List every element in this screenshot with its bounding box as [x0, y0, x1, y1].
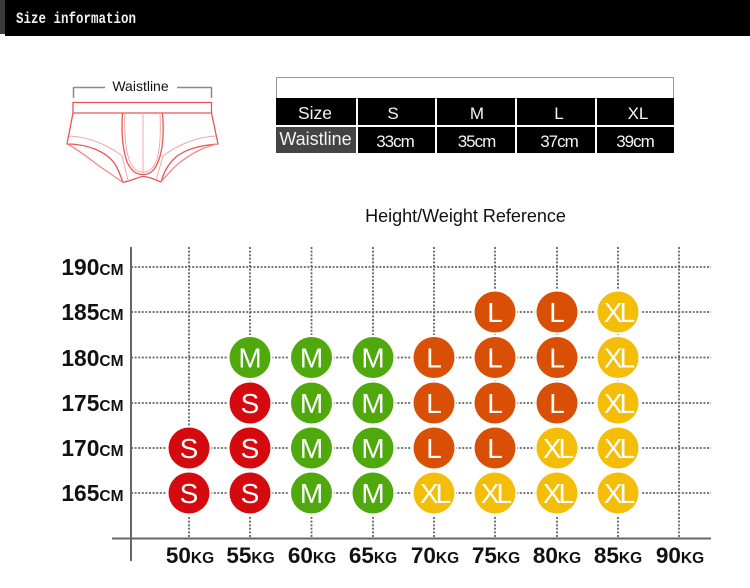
size table: M [470, 104, 484, 123]
header bar [0, 0, 750, 36]
size markers: 185 cm row: L [549, 297, 565, 328]
size markers: 165 cm row: XL [543, 478, 574, 509]
size markers: 170 cm row: M [300, 433, 323, 464]
size markers: 175 cm row: M [361, 388, 385, 419]
size markers: 185 cm row: XL [604, 297, 635, 328]
size table: 37cm [540, 132, 579, 151]
size markers: 170 cm row: XL [604, 433, 635, 464]
y axis labels [61, 254, 124, 506]
size markers: 165 cm row: XL [420, 478, 451, 509]
size markers: 170 cm row: S [241, 433, 259, 464]
size table: L [554, 104, 564, 123]
size markers: 175 cm row: M [300, 388, 323, 419]
size markers: 180 cm row: L [487, 342, 503, 374]
size markers: 180 cm row: L [549, 342, 565, 374]
chart title: Height/Weight Reference [365, 206, 566, 226]
size markers: 175 cm row: S [241, 388, 259, 419]
x axis labels: 55KG [226, 543, 275, 568]
size markers: 165 cm row: M [300, 478, 323, 509]
y axis labels: 175CM [61, 390, 124, 416]
size markers: 175 cm row [228, 380, 640, 426]
size markers: 180 cm row [228, 335, 640, 380]
y axis labels: 180CM [61, 345, 124, 371]
size table: S [387, 104, 399, 123]
size markers: 175 cm row: XL [604, 388, 635, 419]
x axis labels: 80KG [533, 543, 581, 568]
x axis labels: 75KG [472, 543, 520, 568]
y axis labels: 170CM [61, 435, 124, 461]
size table: XL [628, 104, 648, 123]
x axis labels: 65KG [349, 543, 397, 568]
header bar: Size information [16, 11, 136, 29]
icon: briefs with waistline bracket [67, 78, 218, 182]
size markers: 170 cm row: XL [543, 433, 574, 464]
size markers: 170 cm row: S [180, 433, 198, 464]
size table: 33cm [376, 132, 415, 151]
x axis labels: 70KG [411, 543, 459, 568]
size markers: 175 cm row: L [426, 388, 442, 419]
size table: 39cm [616, 132, 655, 151]
x axis labels: 90KG [656, 543, 704, 568]
size markers: 175 cm row: L [487, 388, 503, 419]
size markers: 165 cm row: M [361, 478, 385, 509]
size markers: 165 cm row: S [180, 478, 198, 509]
size table: 35cm [458, 132, 496, 151]
size markers: 170 cm row: L [487, 433, 503, 464]
x axis labels: 50KG [166, 543, 214, 568]
x axis labels [166, 543, 704, 568]
size markers: 170 cm row: M [361, 433, 385, 464]
size markers: 170 cm row: L [426, 433, 442, 464]
size markers: 165 cm row [166, 470, 640, 516]
size markers: 180 cm row: M [238, 342, 262, 374]
size markers: 165 cm row: XL [481, 478, 512, 509]
y axis labels: 165CM [61, 480, 124, 506]
size markers: 180 cm row: M [361, 342, 385, 374]
size table: Size [298, 103, 332, 123]
size table: Waistline [279, 129, 352, 149]
size markers: 180 cm row: L [426, 342, 442, 374]
size markers: 175 cm row: L [549, 388, 565, 419]
icon: briefs with waistline bracket: Waistline [112, 78, 169, 94]
grid lines [131, 247, 711, 538]
size markers: 165 cm row: S [241, 478, 259, 509]
size markers: 185 cm row [472, 290, 640, 334]
size markers: 185 cm row: L [487, 297, 503, 328]
size markers: 180 cm row: XL [604, 342, 635, 374]
size markers: 170 cm row [166, 426, 640, 470]
x axis labels: 60KG [288, 543, 336, 568]
y axis labels: 185CM [61, 299, 124, 325]
axes [112, 247, 711, 561]
size table [276, 78, 674, 153]
x axis labels: 85KG [594, 543, 642, 568]
y axis labels: 190CM [61, 254, 124, 280]
size markers: 165 cm row: XL [604, 478, 635, 509]
size markers: 180 cm row: M [300, 342, 323, 374]
